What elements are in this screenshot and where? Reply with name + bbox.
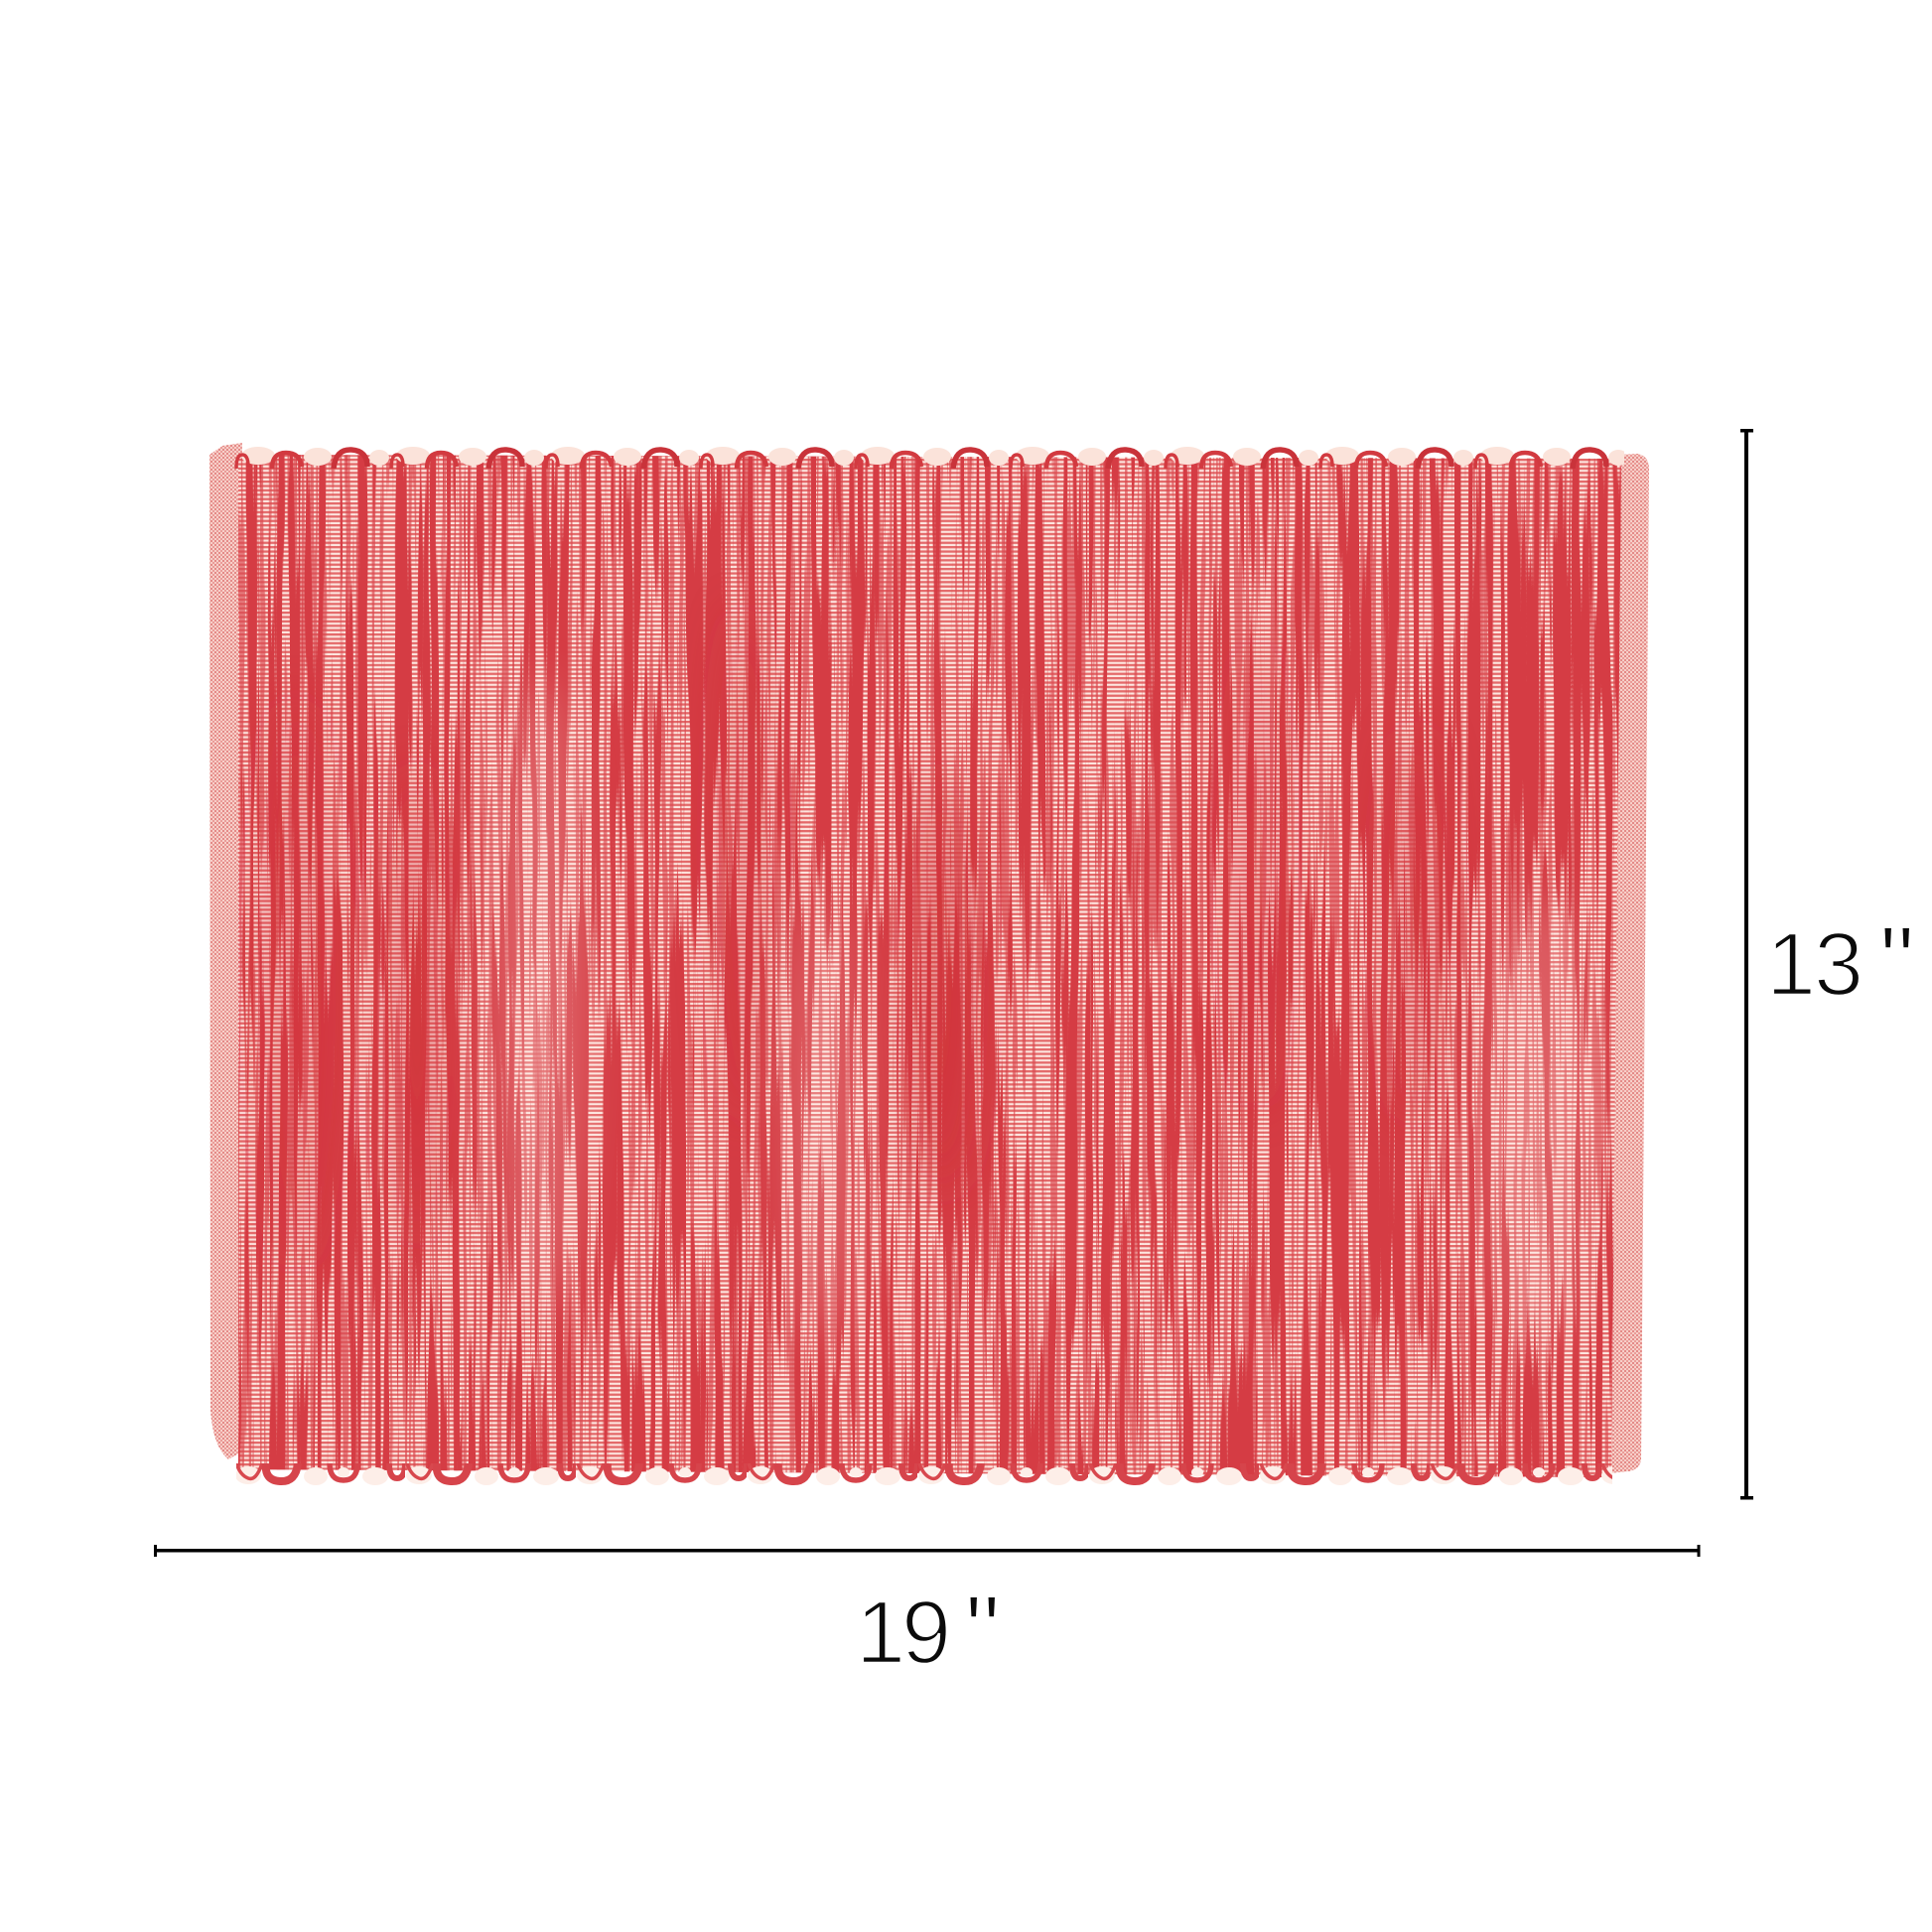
tonal shading <box>256 606 1590 1350</box>
label: 13 inches: " <box>1879 906 1914 1018</box>
dimension: width arrow <box>154 1545 1700 1557</box>
label: 13 inches: 1 <box>1766 915 1816 1015</box>
red strands <box>238 447 1628 1484</box>
left selvedge <box>209 443 242 1459</box>
label: 13 inches: 3 <box>1814 915 1863 1015</box>
label: 19 inches: " <box>965 1576 1001 1687</box>
label: 19 inches <box>856 1576 1001 1687</box>
woven body <box>238 455 1621 1477</box>
bottom fringe loops <box>236 1463 1612 1487</box>
top fringe loops <box>234 441 1624 469</box>
dimension: height arrow <box>1740 429 1753 1499</box>
label: 13 inches <box>1766 906 1914 1018</box>
right selvedge <box>1610 454 1649 1473</box>
label: 19 inches: 1 <box>856 1584 905 1683</box>
placemat <box>209 441 1649 1487</box>
label: 19 inches: 9 <box>901 1584 951 1683</box>
